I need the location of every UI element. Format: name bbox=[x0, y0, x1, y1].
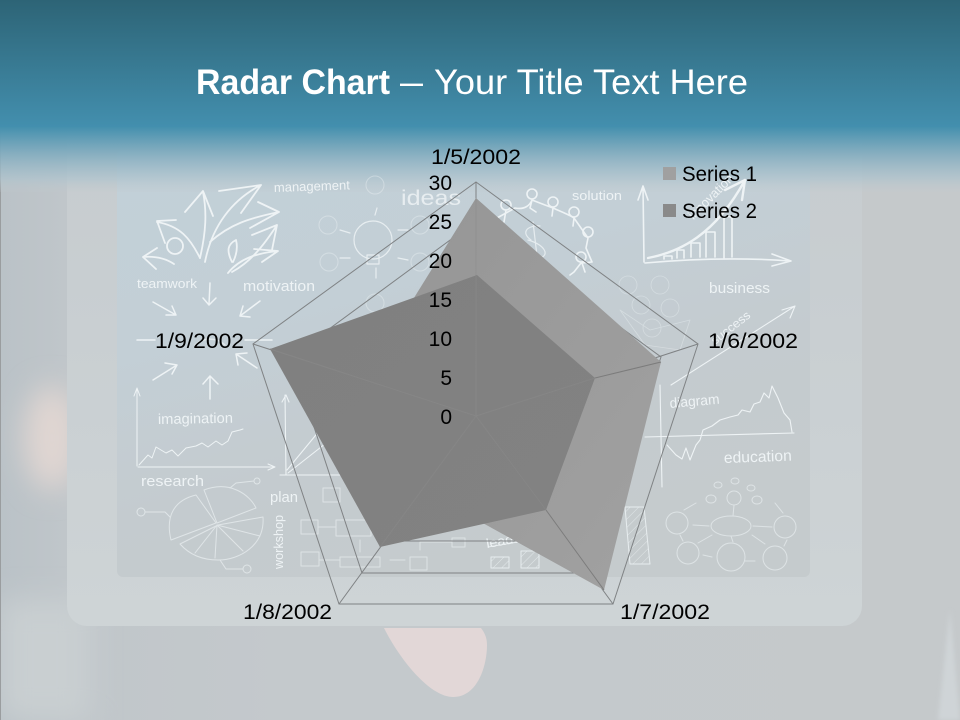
value axis labels: 20 bbox=[429, 250, 452, 273]
value axis labels: 25 bbox=[429, 211, 452, 234]
icon: network diagram bbox=[666, 478, 796, 571]
category labels: 1/5/2002 bbox=[431, 146, 521, 169]
doodle labels: management bbox=[274, 177, 350, 195]
chart: jagged diagram line bbox=[645, 385, 794, 487]
value axis labels: 30 bbox=[429, 172, 452, 195]
doodle labels: workshop bbox=[271, 515, 286, 570]
category labels: 1/9/2002 bbox=[155, 330, 244, 353]
doodle labels: solution bbox=[572, 188, 622, 203]
series edges and spokes bbox=[270, 198, 661, 590]
screen doodles bbox=[134, 171, 796, 573]
series 1 area bbox=[363, 198, 661, 590]
doodle labels: success bbox=[708, 308, 753, 347]
radar grid bbox=[253, 182, 698, 604]
radar chart bbox=[155, 146, 798, 624]
icon: workshop boxes bbox=[301, 488, 465, 570]
series 2 area bbox=[270, 275, 595, 547]
icon: people circle bbox=[497, 189, 593, 275]
value axis labels bbox=[429, 172, 452, 429]
value axis labels: 10 bbox=[429, 328, 452, 351]
header band bbox=[0, 0, 960, 192]
doodle labels: education bbox=[724, 448, 792, 467]
doodle labels: ideas bbox=[401, 187, 461, 210]
value axis labels: 0 bbox=[440, 406, 452, 429]
doodle labels: business bbox=[709, 280, 770, 297]
icon: lightbulbs bbox=[319, 176, 429, 312]
doodle labels: imagination bbox=[158, 411, 233, 428]
chart: growth bars bbox=[638, 180, 791, 266]
finger bbox=[384, 628, 487, 697]
chart: pie bbox=[137, 478, 263, 573]
title: Your Title Text Here bbox=[434, 63, 748, 102]
doodle labels: diagram bbox=[669, 391, 720, 411]
chart: imagination line chart bbox=[134, 388, 275, 470]
icon: arrows to bulb bbox=[137, 283, 272, 399]
icon: bulb cluster bbox=[619, 276, 690, 350]
tablet screen bbox=[117, 150, 810, 577]
chart: hatched bars bbox=[488, 507, 650, 568]
tablet frame bbox=[67, 100, 862, 626]
doodle labels: plan bbox=[270, 489, 298, 506]
doodle labels: innovation bbox=[685, 171, 737, 222]
category labels bbox=[155, 146, 798, 624]
doodle labels: leader bbox=[485, 529, 528, 551]
legend: Series 1 bbox=[682, 163, 757, 186]
legend bbox=[663, 163, 757, 223]
category labels: 1/6/2002 bbox=[708, 330, 798, 353]
value axis labels: 5 bbox=[440, 367, 452, 390]
title bbox=[196, 63, 748, 102]
doodle labels: teamwork bbox=[137, 276, 198, 291]
doodle labels bbox=[137, 171, 792, 570]
category labels: 1/8/2002 bbox=[243, 601, 332, 624]
icon: growth arrows bbox=[143, 185, 279, 273]
doodle labels: motivation bbox=[243, 278, 315, 295]
value axis labels: 15 bbox=[429, 289, 452, 312]
legend: Series 2 bbox=[682, 200, 757, 223]
chart: plan line chart bbox=[280, 395, 345, 475]
doodle labels: research bbox=[141, 473, 204, 490]
category labels: 1/7/2002 bbox=[620, 601, 710, 624]
title: Radar Chart bbox=[196, 63, 390, 102]
icon: dollar sign bbox=[526, 222, 545, 258]
icon: central lightbulb bbox=[340, 208, 408, 278]
title: – bbox=[400, 63, 424, 102]
icon: success arrow bbox=[671, 306, 795, 385]
